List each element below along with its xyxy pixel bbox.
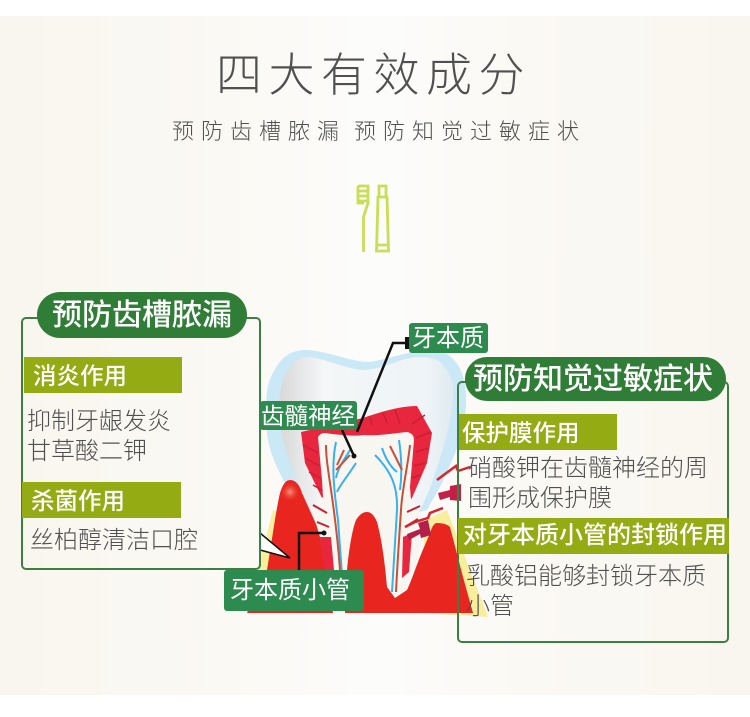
heading pill: right — [465, 357, 726, 401]
bar: protective film — [459, 414, 617, 450]
heading pill: left — [37, 292, 247, 338]
bar: anti-inflammation — [24, 357, 182, 393]
bar: antibacterial — [22, 482, 181, 518]
gum highlight — [280, 482, 300, 502]
text: tubule sealing: 乳酸铝能够封锁牙本质 — [466, 563, 706, 590]
title: 四大有效成分 — [216, 49, 531, 101]
text: antibacterial: 丝柏醇清洁口腔 — [30, 527, 198, 554]
bar: antibacterial: 杀菌作用 — [31, 488, 125, 514]
arrows: red shock — [405, 466, 470, 527]
icon: gums — [247, 480, 473, 613]
text: tubule sealing: 小管 — [466, 593, 514, 620]
icon: toothbrush and toothpaste — [356, 184, 390, 252]
icon: root dentin stripes — [320, 537, 334, 570]
panel: prevent alveolar pyorrhea — [21, 317, 261, 570]
text: anti-inflammation — [27, 408, 171, 465]
panel: prevent sensitivity — [457, 381, 729, 643]
icon: dentin — [301, 406, 432, 505]
bar: anti-inflammation: 消炎作用 — [33, 363, 127, 389]
icon: yellow bone — [247, 510, 488, 617]
pointer dots — [322, 337, 411, 536]
icon: middle gum — [345, 512, 407, 613]
label: pulp nerve: 齿髓神经 — [261, 403, 355, 429]
dentin dashes — [313, 505, 420, 527]
icon: right root stripes — [402, 533, 412, 578]
pointer lines — [260, 343, 405, 572]
text: protective film: 硝酸钾在齿髓神经的周 — [468, 455, 708, 482]
bar: tubule sealing: 对牙本质小管的封锁作用 — [463, 522, 727, 549]
text: anti-inflammation: 甘草酸二钾 — [27, 438, 147, 465]
subtitle: 预防齿槽脓漏 — [172, 119, 346, 144]
icon: crown — [279, 357, 453, 540]
icon: sealing plug upper — [438, 484, 461, 501]
text: anti-inflammation: 抑制牙龈发炎 — [27, 408, 171, 435]
text: protective film — [468, 455, 708, 512]
icon: tooth roots — [311, 432, 423, 613]
label: dentin: 牙本质 — [412, 325, 484, 352]
icon: sealing plug lower — [407, 520, 431, 540]
heading pill: right: 预防知觉过敏症状 — [473, 363, 713, 396]
icon: blue enamel halo — [266, 350, 466, 540]
text: protective film: 围形成保护膜 — [468, 485, 612, 512]
icon: nerves — [326, 440, 410, 592]
bar: protective film: 保护膜作用 — [462, 420, 580, 446]
heading pill: left: 预防齿槽脓漏 — [52, 299, 232, 332]
subtitle: 预防知觉过敏症状 — [354, 119, 586, 144]
dentin stripes — [303, 410, 431, 492]
subtitle — [172, 119, 586, 144]
label: dentin tubules: 牙本质小管 — [230, 577, 350, 604]
label: dentin tubules — [224, 570, 364, 611]
text: tubule sealing — [466, 563, 706, 620]
